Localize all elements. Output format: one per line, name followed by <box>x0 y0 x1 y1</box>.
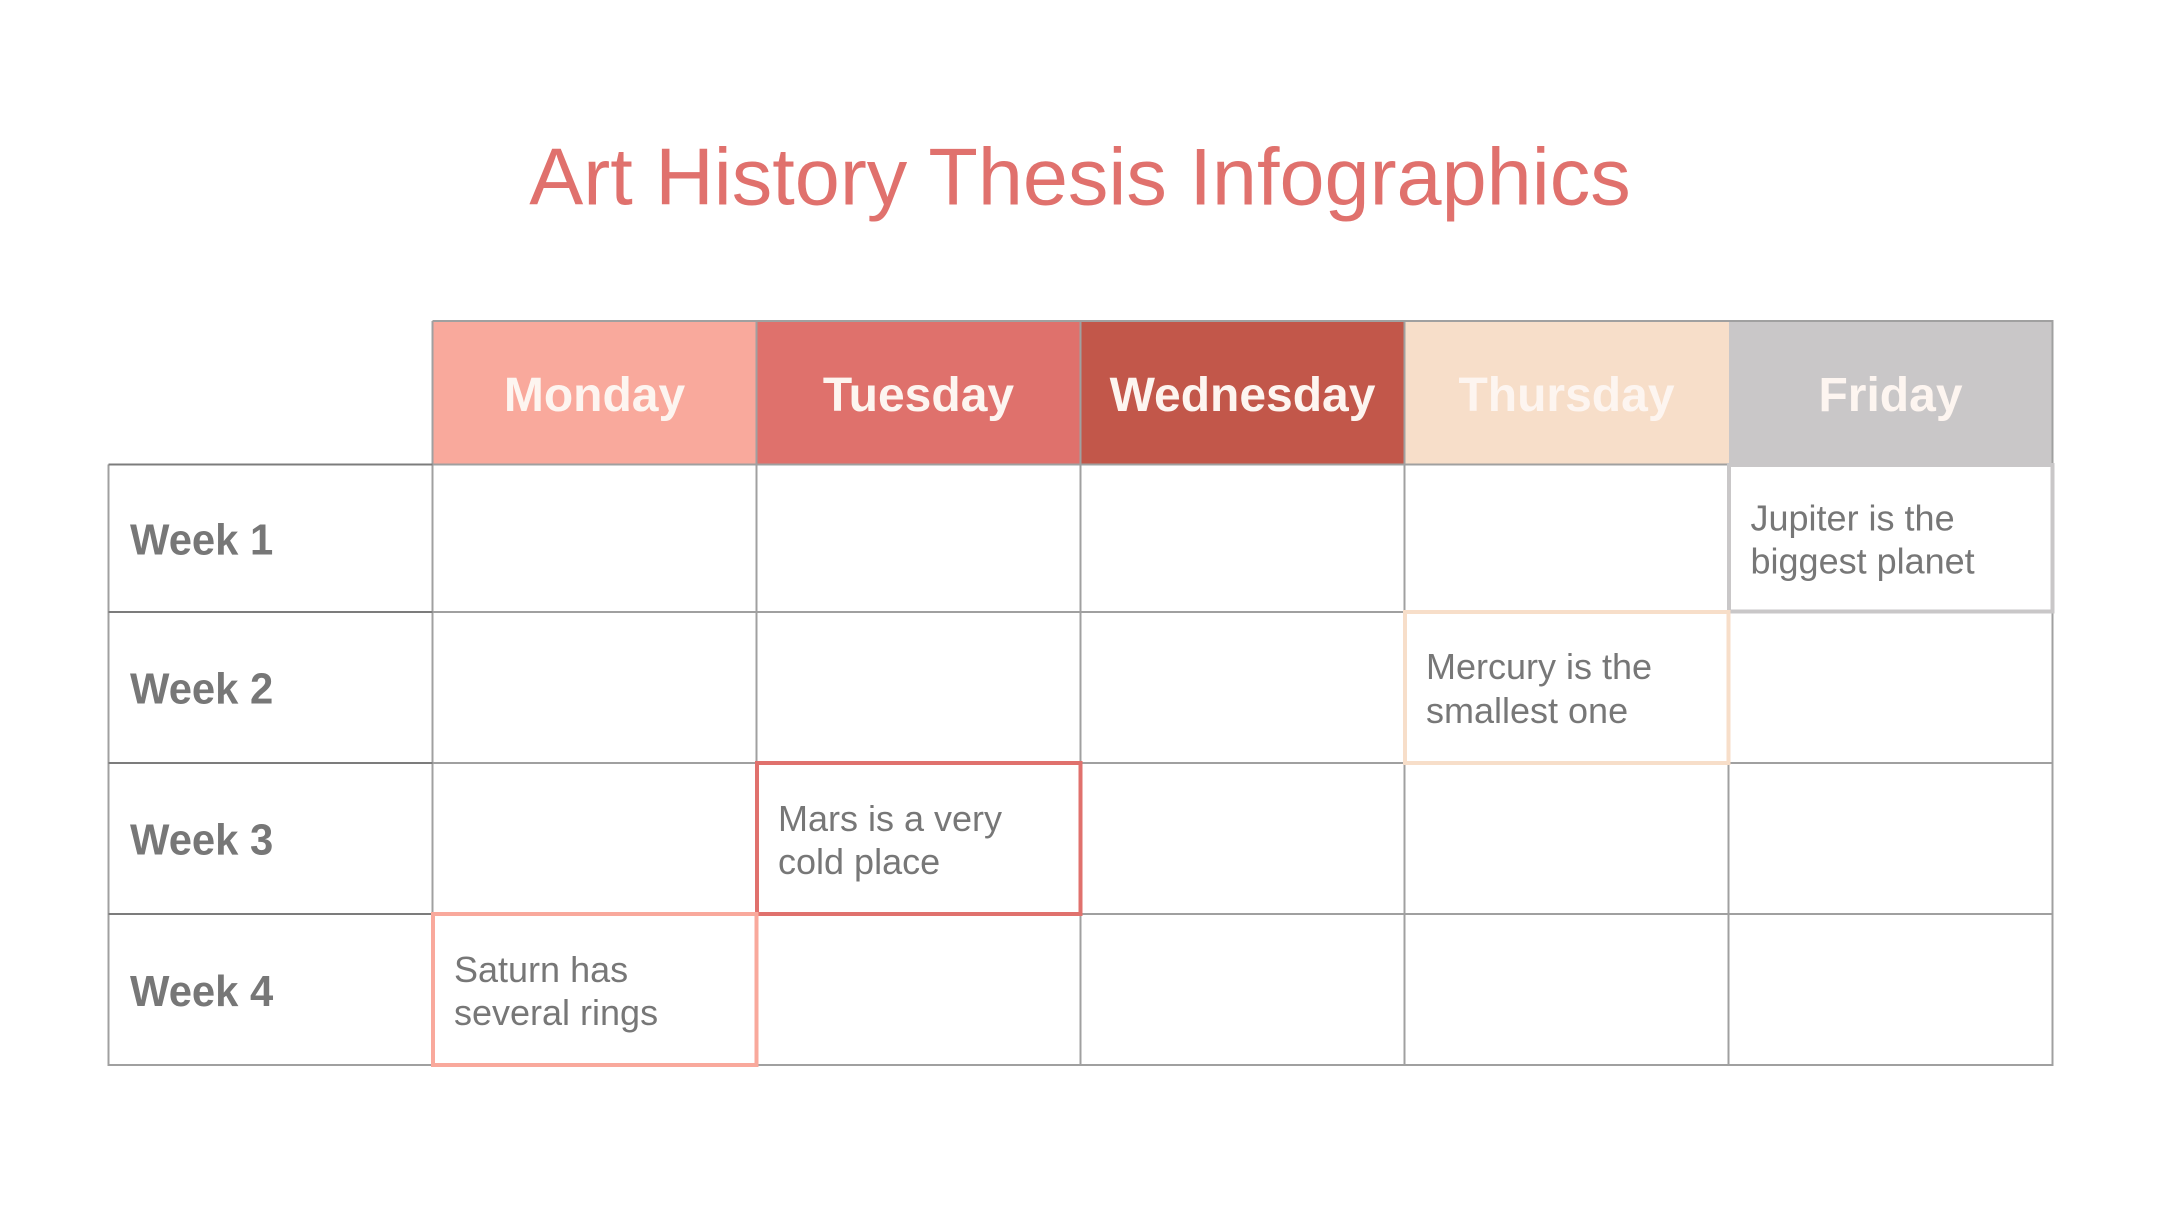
event: Saturn, Monday week 4: Saturn has <box>454 949 628 990</box>
title: Art History Thesis Infographics <box>529 132 1631 222</box>
header: Friday <box>1729 321 2052 464</box>
row label: Week 4: Week 4 <box>130 967 273 1016</box>
schedule table <box>108 321 2052 1065</box>
header: Tuesday <box>757 321 1081 464</box>
event: Jupiter, Friday week 1 <box>1729 465 2052 612</box>
event: Mars, Tuesday week 3: cold place <box>778 841 940 882</box>
event: Mercury, Thursday week 2 <box>1405 612 1728 763</box>
header: Thursday: Thursday <box>1458 369 1675 422</box>
header: Wednesday <box>1081 321 1405 464</box>
row label: Week 2: Week 2 <box>130 665 273 714</box>
header: Wednesday: Wednesday <box>1110 369 1376 422</box>
header: Thursday <box>1405 321 1729 464</box>
event: Jupiter, Friday week 1: biggest planet <box>1750 540 1975 582</box>
event: Mercury, Thursday week 2: Mercury is the <box>1426 646 1652 687</box>
event: Jupiter, Friday week 1: Jupiter is the <box>1750 498 1955 538</box>
event: Saturn, Monday week 4 <box>433 914 756 1065</box>
row label: Week 3: Week 3 <box>130 816 273 865</box>
event: Mercury, Thursday week 2: smallest one <box>1426 690 1628 731</box>
header: Friday: Friday <box>1818 369 1963 422</box>
event: Mars, Tuesday week 3 <box>757 763 1080 914</box>
event: Mars, Tuesday week 3: Mars is a very <box>778 798 1002 839</box>
header: Monday: Monday <box>504 369 685 422</box>
event: Saturn, Monday week 4: several rings <box>454 992 658 1033</box>
header: Tuesday: Tuesday <box>823 369 1014 422</box>
header: Monday <box>433 321 757 464</box>
table grid lines <box>108 321 2052 1065</box>
row label: Week 1: Week 1 <box>130 516 273 565</box>
